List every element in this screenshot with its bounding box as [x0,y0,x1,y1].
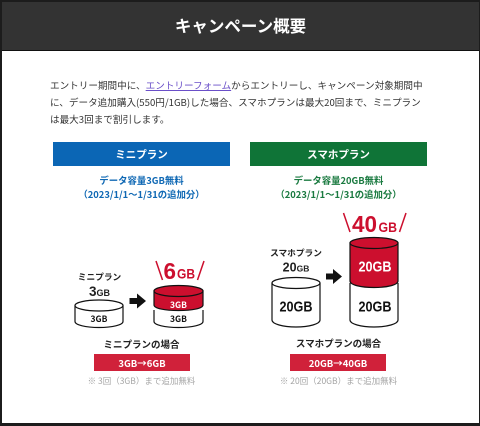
intro paragraph: に、データ追加購入(550円/1GB)した場合、スマホプランは最大20回まで、ミニプラン [50,95,421,109]
arrow: mini plan [130,294,146,308]
smartphone plan current label: スマホプラン [270,246,322,259]
smartphone plan current cylinder: 20GB [280,298,313,316]
mini plan case label: ミニプランの場合 [103,337,180,351]
smartphone plan 40GB callout: 40 [352,211,377,237]
panel: mini plan [53,142,230,200]
mini plan note: ※ 3回（3GB）まで追加無料 [88,375,195,387]
mini plan free data text [78,173,205,200]
mini plan free data text: データ容量3GB無料 [99,173,184,187]
smartphone plan result bar: 20GB→40GB [309,356,367,370]
mini plan current cylinder: 3GB [91,313,108,325]
smartphone plan 40GB callout: GB [378,220,397,235]
intro paragraph [50,78,423,126]
smartphone plan current label: 20GB [283,260,309,274]
mini plan 6GB callout: GB [177,266,195,282]
mini plan result bar [94,354,190,371]
smartphone plan note: ※ 20回（20GB）まで追加無料 [280,375,397,387]
smartphone plan header [250,142,427,166]
title banner [2,2,479,51]
mini plan current cylinder [75,300,123,328]
mini plan 6GB callout [156,258,204,284]
smartphone plan free data text: （2023/1/1～1/31の追加分） [275,186,402,200]
mini plan current label [78,270,122,299]
mini plan header: ミニプラン [115,147,168,162]
mini plan result bar: 3GB→6GB [118,356,166,370]
mini plan doubled cylinder: 3GB [170,299,187,311]
intro paragraph: は最大3回まで割引します。 [50,112,170,126]
mini plan doubled cylinder: 3GB [170,313,187,325]
smartphone plan 40GB callout [344,211,406,237]
smartphone plan doubled cylinder: 20GB [358,298,392,316]
mini plan current label: 3GB [89,284,111,299]
smartphone plan current label [270,246,322,274]
mini plan 6GB callout: 6 [164,258,176,284]
panel: smartphone plan [250,142,427,200]
smartphone plan doubled cylinder [350,238,398,327]
smartphone plan current cylinder [272,278,320,327]
smartphone plan free data text: データ容量20GB無料 [294,173,383,187]
smartphone plan free data text [275,173,402,200]
smartphone plan header: スマホプラン [307,147,370,162]
smartphone plan result bar [290,354,386,371]
smartphone plan case label: スマホプランの場合 [296,336,381,350]
mini plan current label: ミニプラン [78,270,122,283]
title banner: キャンペーン概要 [175,13,306,37]
mini plan free data text: （2023/1/1～1/31の追加分） [78,186,205,200]
mini plan header [53,142,230,166]
smartphone plan doubled cylinder: 20GB [358,258,392,276]
intro paragraph: エントリー期間中に、エントリーフォームからエントリーし、キャンペーン対象期間中 [50,78,423,92]
arrow: smartphone plan [326,269,342,284]
mini plan doubled cylinder [154,286,203,328]
